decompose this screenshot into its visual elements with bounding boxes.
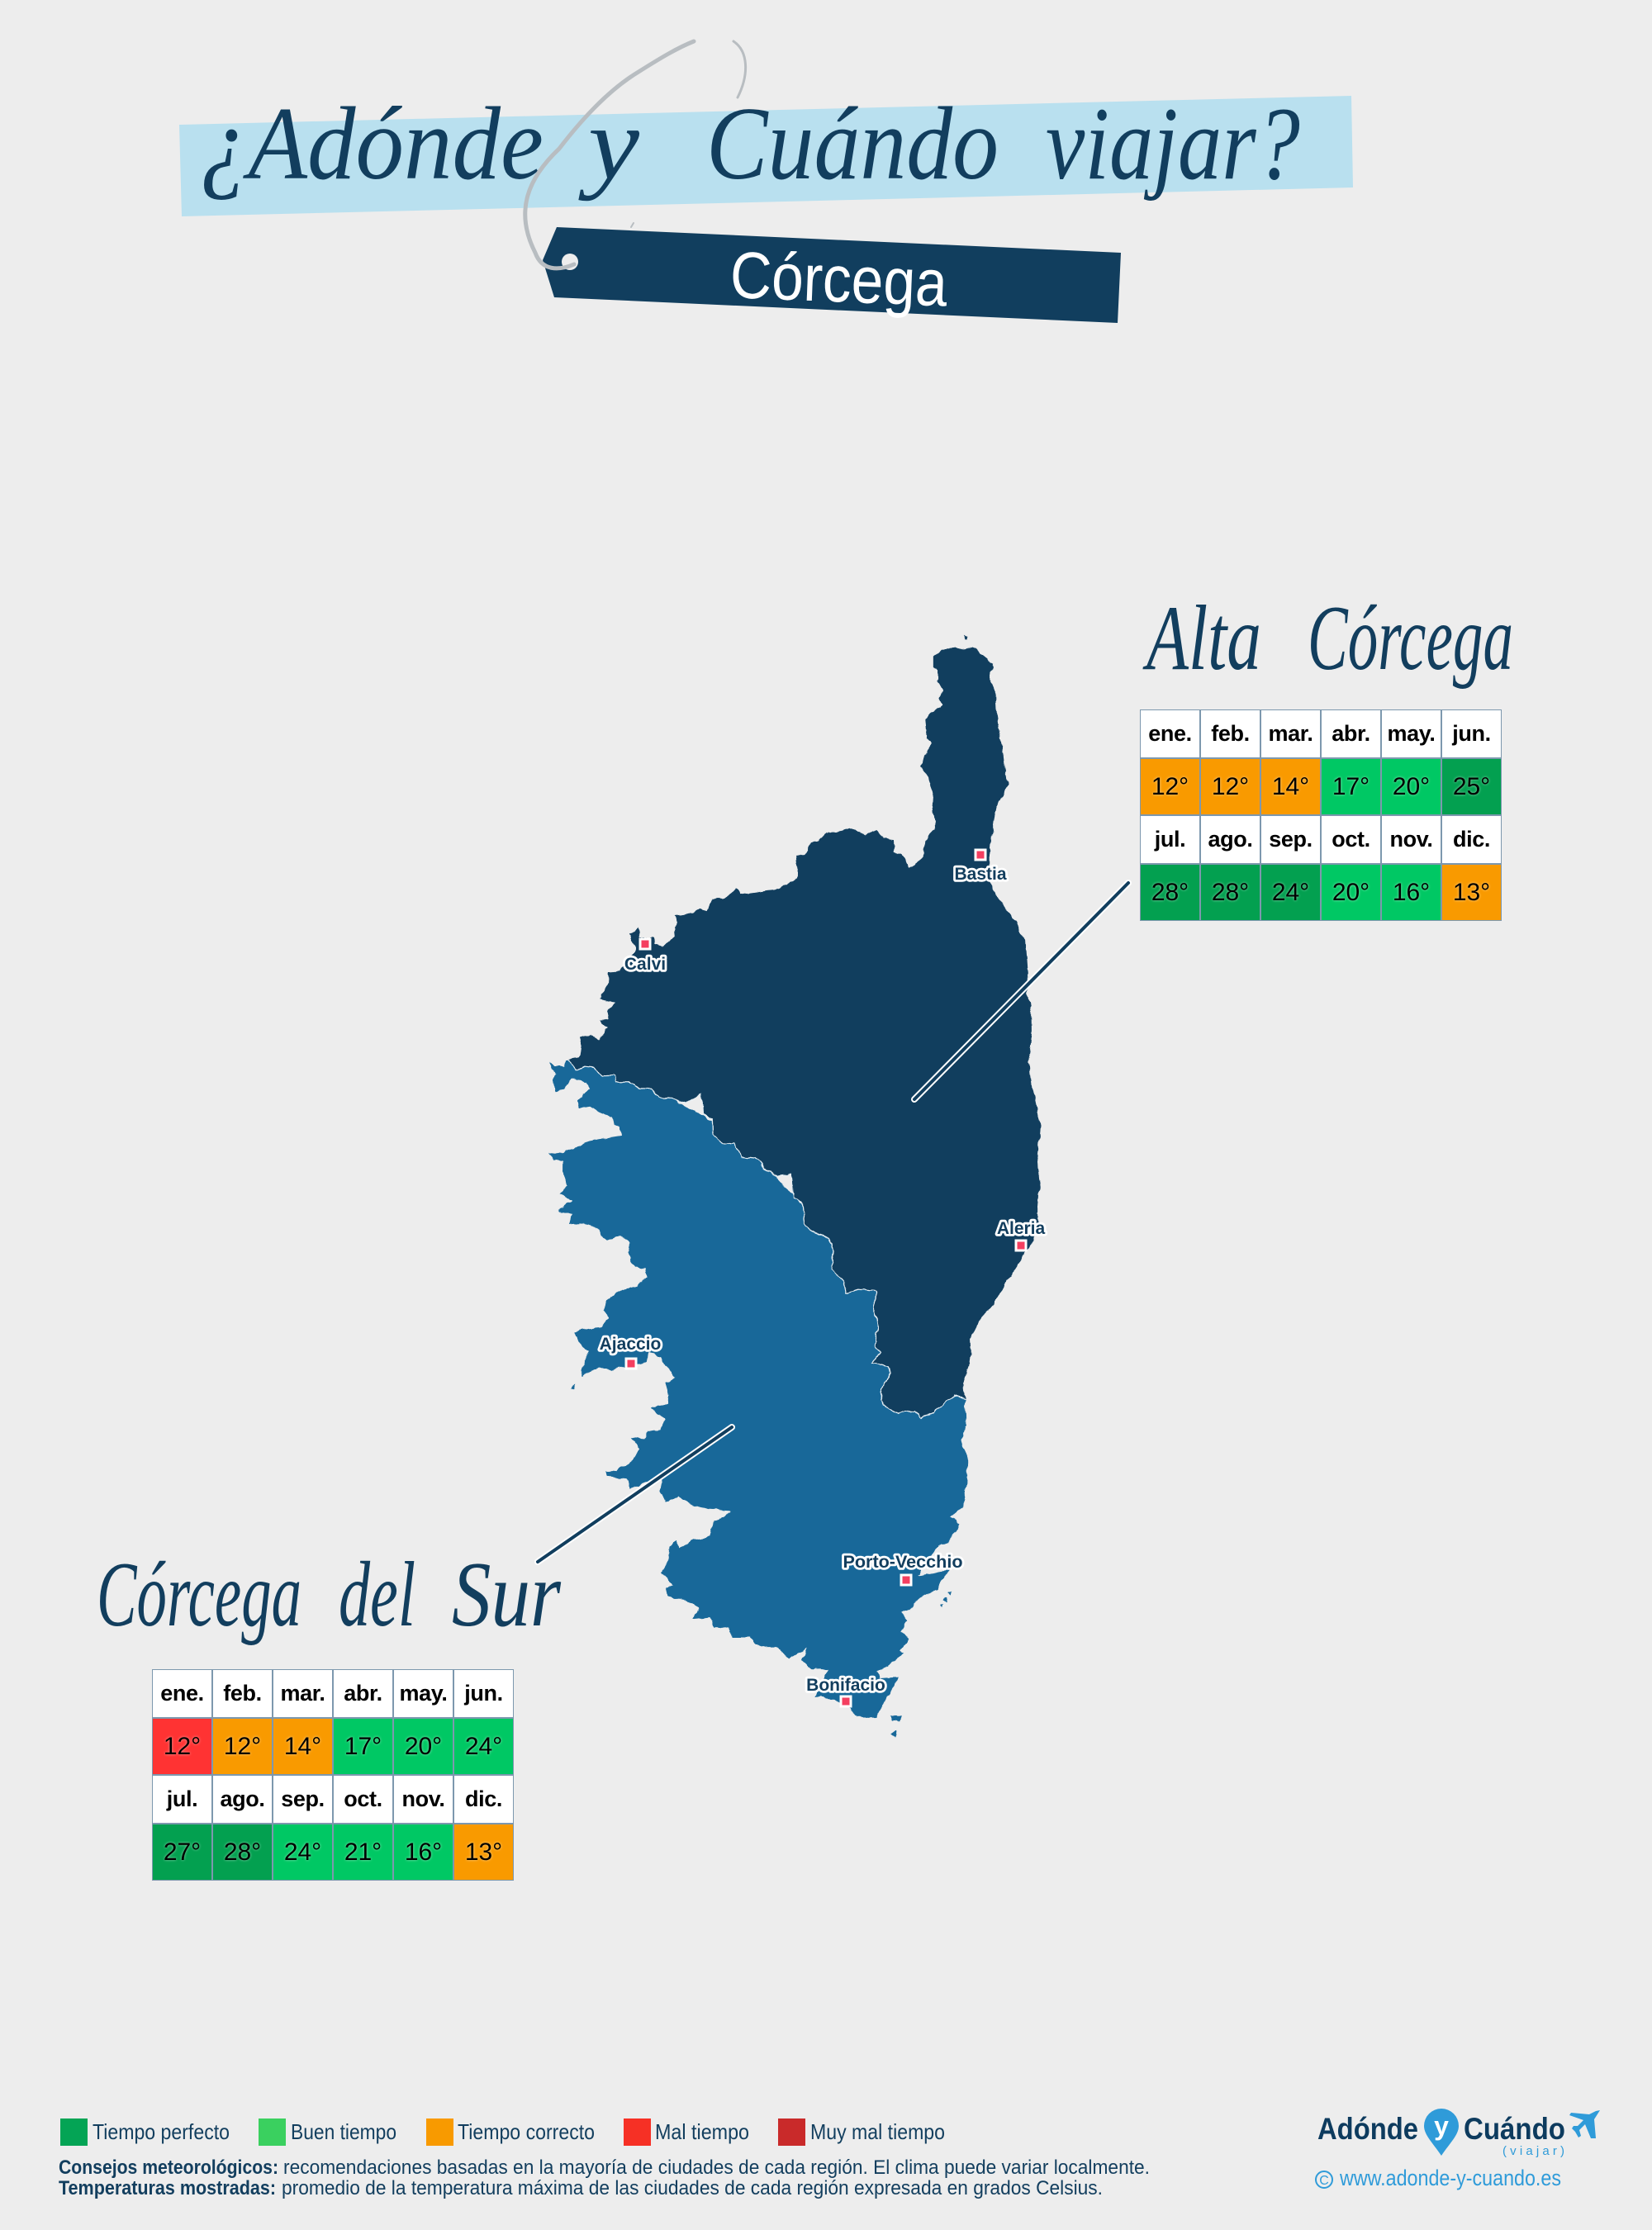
map of Corsica <box>548 635 1041 1739</box>
table: Alta Córcega: 28° <box>1212 879 1249 905</box>
table: Alta Córcega: 25° <box>1453 773 1490 799</box>
table: Córcega del Sur: 16° <box>405 1839 442 1865</box>
legend: Tiempo perfecto: Tiempo perfecto <box>93 2119 230 2144</box>
city: Bonifacio <box>806 1676 885 1706</box>
legend <box>60 2118 945 2146</box>
table: Alta Córcega: 14° <box>1272 773 1309 799</box>
table: Alta Córcega: 13° <box>1453 879 1490 905</box>
table: Alta Córcega: 28° <box>1151 879 1189 905</box>
table: Alta Córcega: ene. <box>1148 721 1192 746</box>
table: Alta Córcega: 20° <box>1393 773 1430 799</box>
table: Alta Córcega: abr. <box>1332 721 1370 746</box>
table: Alta Córcega: jun. <box>1452 721 1491 746</box>
logo: (viajar) <box>1502 2144 1564 2158</box>
heading: Córcega del Sur <box>97 1544 561 1646</box>
legend: Tiempo correcto <box>426 2118 595 2146</box>
title <box>200 87 1300 202</box>
city: Porto-Vecchio <box>843 1553 963 1585</box>
title banner: light blue band <box>179 96 1353 216</box>
city: Bonifacio: Bonifacio <box>806 1676 885 1695</box>
table: Alta Córcega: 24° <box>1272 879 1309 905</box>
note: temperaturas mostradas: Temperaturas mostradas: <box>59 2177 276 2199</box>
legend: Muy mal tiempo <box>778 2118 945 2146</box>
legend: Buen tiempo <box>259 2118 396 2146</box>
heading: Alta Córcega <box>1142 587 1513 690</box>
table: Córcega del Sur: 12° <box>164 1733 201 1759</box>
table: Alta Córcega: nov. <box>1390 827 1432 852</box>
table: Córcega del Sur: 17° <box>344 1733 382 1759</box>
table: Córcega del Sur <box>152 1669 514 1881</box>
table: Córcega del Sur: abr. <box>344 1681 382 1706</box>
heading: Córcega del Sur: Sur <box>452 1544 561 1646</box>
table: Córcega del Sur: 28° <box>224 1839 261 1865</box>
table: Alta Córcega: sep. <box>1269 827 1313 852</box>
icon: map pin <box>1424 2109 1459 2156</box>
legend: Buen tiempo: Buen tiempo <box>291 2119 396 2144</box>
connector: Córcega del Sur <box>538 1427 732 1562</box>
table: Alta Córcega: oct. <box>1332 827 1370 852</box>
website: www.adonde-y-cuando.es <box>1339 2166 1561 2190</box>
table: Alta Córcega: dic. <box>1453 827 1490 852</box>
region border <box>568 1060 965 1417</box>
heading: Córcega del Sur: Córcega <box>97 1544 301 1646</box>
heading: Córcega del Sur: del <box>339 1544 415 1646</box>
city: Aleria <box>997 1219 1045 1250</box>
table: Córcega del Sur: 20° <box>405 1733 442 1759</box>
website: C <box>1319 2174 1329 2188</box>
legend: Muy mal tiempo: Muy mal tiempo <box>810 2119 945 2144</box>
table: Córcega del Sur: 27° <box>164 1839 201 1865</box>
table: Alta Córcega: 12° <box>1151 773 1189 799</box>
table: Alta Córcega <box>1140 709 1502 921</box>
table: Alta Córcega: 20° <box>1332 879 1370 905</box>
table: Córcega del Sur: 21° <box>344 1839 382 1865</box>
note: consejos meteorológicos: recomendaciones basadas en la mayoría de ciudades de cada región. El clima puede variar localmente. <box>283 2156 1150 2179</box>
city: Calvi: Calvi <box>624 955 666 974</box>
table: Alta Córcega: jul. <box>1155 827 1185 852</box>
city: Ajaccio <box>600 1335 661 1369</box>
heading: Alta Córcega: Alta <box>1142 587 1261 690</box>
logo <box>1317 2109 1600 2158</box>
region: Corse-du-Sud <box>548 1059 967 1739</box>
title: viajar? <box>1046 87 1300 202</box>
table: Córcega del Sur: ene. <box>160 1681 204 1706</box>
city: Bastia: Bastia <box>954 865 1007 884</box>
table: Córcega del Sur: jun. <box>464 1681 503 1706</box>
title: ¿Adónde <box>200 87 544 202</box>
table: Córcega del Sur: may. <box>400 1681 447 1706</box>
connector: Alta Córcega <box>914 883 1128 1099</box>
table: Córcega del Sur: mar. <box>281 1681 325 1706</box>
icon: airplane <box>1569 2110 1600 2138</box>
table: Alta Córcega: 16° <box>1393 879 1430 905</box>
table: Córcega del Sur: oct. <box>344 1786 382 1811</box>
legend: Tiempo correcto: Tiempo correcto <box>458 2119 595 2144</box>
table: Alta Córcega: mar. <box>1269 721 1313 746</box>
logo: Adónde <box>1317 2112 1418 2146</box>
city: Calvi <box>624 939 666 974</box>
table: Córcega del Sur: nov. <box>402 1786 444 1811</box>
city: Bastia <box>954 850 1007 884</box>
title: Cuándo <box>706 87 999 202</box>
table: Córcega del Sur: 13° <box>465 1839 502 1865</box>
table: Córcega del Sur: feb. <box>223 1681 262 1706</box>
note: consejos meteorológicos: Consejos meteorológicos: <box>59 2156 278 2179</box>
table: Córcega del Sur: ago. <box>221 1786 264 1811</box>
table: Córcega del Sur: 24° <box>465 1733 502 1759</box>
region: Haute-Corse <box>568 635 1041 1417</box>
city: Aleria: Aleria <box>997 1219 1045 1238</box>
note: temperaturas mostradas: promedio de la temperatura máxima de las ciudades de cada región expresada en grados Celsius. <box>282 2177 1103 2199</box>
table: Córcega del Sur: sep. <box>281 1786 325 1811</box>
legend: Tiempo perfecto <box>60 2118 230 2146</box>
title: y <box>578 87 639 202</box>
table: Alta Córcega: may. <box>1388 721 1435 746</box>
table: Alta Córcega: 17° <box>1332 773 1370 799</box>
table: Córcega del Sur: dic. <box>465 1786 502 1811</box>
legend: Mal tiempo: Mal tiempo <box>655 2119 749 2144</box>
table: Alta Córcega: 12° <box>1212 773 1249 799</box>
tag: destination label: Córcega <box>729 238 949 320</box>
table: Alta Córcega: feb. <box>1211 721 1250 746</box>
table: Córcega del Sur: 14° <box>284 1733 321 1759</box>
table: Córcega del Sur: 12° <box>224 1733 261 1759</box>
city: Porto-Vecchio: Porto-Vecchio <box>843 1553 963 1572</box>
legend: Mal tiempo <box>624 2118 749 2146</box>
tag string loop <box>525 41 746 268</box>
tag: destination label <box>543 227 1121 323</box>
table: Córcega del Sur: jul. <box>167 1786 197 1811</box>
logo: y <box>1434 2111 1449 2141</box>
logo: Cuándo <box>1464 2112 1565 2146</box>
table: Córcega del Sur: 24° <box>284 1839 321 1865</box>
table: Alta Córcega: ago. <box>1208 827 1252 852</box>
heading: Alta Córcega: Córcega <box>1308 587 1513 690</box>
city: Ajaccio: Ajaccio <box>600 1335 661 1354</box>
